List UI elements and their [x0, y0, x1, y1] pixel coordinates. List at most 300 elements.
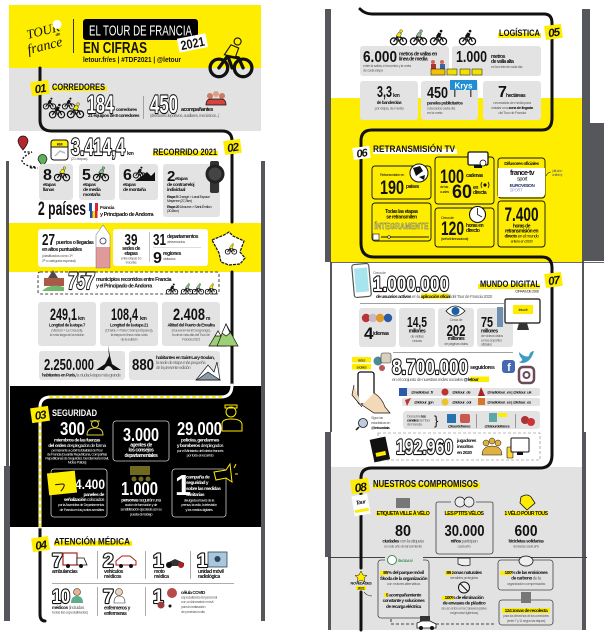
card: sedes, departamentos y regiones: sedes de [122, 246, 141, 252]
item: célula COVID [153, 587, 218, 614]
card: 6 etapas de montaña: etapas [123, 182, 136, 188]
card: 2.250.000 París [39, 351, 125, 380]
box: 7.400 horas: directo en el mundo [504, 234, 539, 238]
item: célula COVID: para la realización [181, 605, 206, 609]
box: 757 municipios [38, 268, 219, 295]
stat: 1.000 personas [121, 466, 162, 516]
section 06 tag: 06 [356, 147, 369, 161]
card: 14,5 millones visitas [399, 308, 435, 347]
card: 75 millones vídeos: en los soportes [481, 338, 502, 342]
commitment: ville à vélo [376, 498, 430, 548]
stat: 29.000: por el Ministerio del Interior francés [177, 449, 224, 453]
box: 120 horas en directo: directo [466, 228, 480, 234]
section 05 tag: 05 [548, 27, 561, 40]
card: etapa 21: (Chatou > París Champs-Élysées), [105, 328, 153, 332]
item: ambulancias: 7 [52, 551, 62, 572]
card: 75 millones vídeos: 75 [481, 314, 493, 331]
card: 27 puertos: 2ª o categoría especial) [42, 258, 76, 263]
icon: riders group [43, 98, 84, 118]
box: 7.400 horas: 7.400 [504, 205, 538, 226]
box: difusores oficiales: EUROVISION [510, 183, 535, 188]
card: 1.000 metros de valla alta: de valla alta [491, 59, 514, 65]
card: 27 puertos [38, 229, 108, 267]
note: difusión anfitrión: anfitrión) [552, 173, 562, 177]
card: etapa 21: Longitud de la etapa 21 [110, 322, 149, 328]
icon: smartphone [352, 263, 371, 298]
icon: hand holding phone [352, 372, 390, 413]
card: 27 puertos: 27 [42, 232, 55, 249]
card: sedes, departamentos y regiones: 31 [153, 232, 166, 249]
stat: 300 miembros: permanente a cubrir la totalidad del Tour [52, 448, 104, 452]
card: 6 etapas de montaña: 6 [123, 167, 132, 184]
note: estadísticas letourdata [356, 416, 391, 430]
note: difusión anfitrión: (difusión [552, 169, 562, 173]
item: 10 médicos [52, 587, 89, 614]
item: moto médica: médica [154, 574, 169, 580]
stat: 29.000: 29.000 [177, 419, 222, 439]
icon: police officer [87, 420, 103, 435]
icon: yellow road sign [47, 471, 77, 495]
card: 8 etapas llanas: llanas [43, 187, 55, 193]
card: Envalira: la cima más alta del Tour de [172, 333, 210, 337]
card: 880 Saint-Lary-Soulan [129, 351, 220, 380]
box: 120 horas en directo: (señal internacional) [441, 237, 469, 241]
card: 6.000 metros de vallas: metros de vallas en [399, 52, 437, 58]
digital dividers [360, 303, 513, 353]
item: célula COVID: especializada del personal [181, 596, 218, 600]
icon: spectators and barriers [431, 60, 482, 75]
box: todas las etapas íntegramente: Todas las etapas [385, 209, 419, 215]
stat: 300 miembros: miembros de las fuerzas [54, 438, 101, 444]
section 07 tag: 07 [548, 275, 561, 288]
icon: megaphone [214, 464, 238, 482]
card: etapa 7: km [78, 316, 85, 322]
item: moto médica: 1 [153, 551, 164, 572]
card: 4 idiomas: 4 [364, 324, 374, 343]
box: 120 horas en directo: Cerca de [441, 216, 454, 220]
card: 3,3 km banderolas: por etapa, de media [375, 106, 405, 110]
box: 190 países [372, 166, 431, 199]
stat: 29.000 [177, 419, 224, 458]
header: Tour de France logo [22, 18, 68, 58]
box: 192.960 jugadores: 192.960 [396, 436, 453, 459]
card: etapa 7 [38, 302, 96, 346]
card: Envalira: m [206, 316, 211, 322]
box: 3.000 agentes: los consejos [129, 448, 154, 454]
stat: 1.000 personas: puesta de trabajo [130, 512, 152, 516]
card: 2 etapas contrarreloj: individual [167, 187, 185, 193]
card: 7 hectáreas: 7 [498, 84, 507, 101]
stat: 1.000.000 usuarios: 1.000.000 [373, 273, 449, 296]
stat: 1.000 personas: personas seguirán una [121, 498, 162, 502]
card: 880 Saint-Lary-Soulan: la sede de etapa más pequeña [156, 360, 206, 365]
item: ambulancias: ambulancias [52, 569, 78, 575]
card: 2 etapas contrarreloj: Etapa 5 Changé > Laval Espace [167, 195, 210, 199]
section 08 tag: 08 [354, 480, 368, 495]
stat: 29.000: por todo el recorrido [187, 454, 214, 458]
box: 192.960 jugadores: en 2020 [457, 450, 472, 456]
box: 100 cadenas y 60 en directo: cuales [440, 190, 449, 194]
item: vehículos médicos [103, 551, 136, 580]
card: sedes, departamentos y regiones: etapas [124, 251, 138, 257]
card: 5 etapas media montaña [79, 164, 115, 200]
heading: seguridad: SEGURIDAD [52, 408, 97, 419]
item: 7 enfermeros [103, 587, 131, 617]
card: Envalira: (Souvenir Henri Desgrange), [171, 328, 211, 332]
box: 120 horas en directo [435, 208, 494, 247]
panel: right page backgrounds [328, 98, 604, 630]
card: 5 etapas media montaña: 5 [82, 167, 91, 184]
note: estadísticas letourdata: Sigue las [371, 416, 383, 420]
card: 450 paneles: 450 [427, 85, 448, 102]
card: Envalira: 2.408 [173, 305, 205, 324]
card: sedes, departamentos y regiones: entre etapas 10 [121, 256, 141, 260]
icon: cyclist [210, 38, 252, 77]
section 03 tag: 03 [34, 409, 48, 423]
commitment: ville à vélo: en este año de lanzamiento [384, 544, 422, 548]
title: El Tour de Francia en cifras [83, 19, 198, 64]
commitment: ville à vélo: ciudades con la etiqueta [382, 538, 424, 544]
card: etapa 21: la etapa en línea más corta [111, 333, 149, 337]
card: 6 etapas de montaña [119, 164, 158, 200]
commitment: 1 vélo pour tous: 600 [514, 523, 538, 540]
commitment: zonas naturales y plástico: 89 zonas naturales [446, 570, 482, 576]
box: Škoda movilidad: constante y soluciones [383, 598, 425, 603]
stat: 1.000.000 usuarios [373, 271, 493, 299]
box: emisiones de carbono: de carbono de la [511, 576, 542, 580]
heading: mundo digital: MUNDO DIGITAL [480, 279, 540, 290]
card: canales del Tour [403, 411, 540, 429]
box: difusores oficiales [498, 158, 545, 198]
section 06 tag [352, 146, 371, 161]
commitment: zonas naturales y plástico: de uso único en la Caravana (salvo [441, 606, 487, 610]
box: zonas de recolecta: para los desechos de los corredores [503, 614, 549, 618]
box: emisiones de carbono [498, 556, 553, 590]
icon: globe [410, 164, 428, 182]
box: difusores oficiales: france·tv [510, 170, 535, 177]
icon: snowy mountains [196, 362, 220, 380]
box: 100 cadenas y 60 en directo [435, 157, 494, 204]
item: vehículos médicos: vehículos [104, 569, 124, 575]
stat: 2 países [38, 199, 155, 220]
item: vehículos médicos: 2 [103, 551, 113, 572]
card: 6.000 metros de vallas: entre la salida, el recorrido y la meta [363, 64, 412, 68]
box: Škoda movilidad: 5 acompañamiento [386, 592, 422, 598]
social handles: @letour_jpn [414, 400, 434, 404]
icon: France map [212, 232, 245, 265]
icon: desktop screen: letour.fr [519, 308, 529, 312]
card: 14,5 millones visitas: de visitas [410, 334, 424, 338]
stat divider [142, 96, 145, 119]
card: 7 hectáreas [483, 81, 541, 120]
box: 4.400 paneles: señalización colocados [64, 497, 105, 502]
card: sedes, departamentos y regiones: inocetas [126, 260, 137, 264]
icons: twitter, facebook, instagram [502, 351, 534, 383]
heading: nuestros compromisos: NUESTROS COMPROMISOS [373, 479, 478, 490]
box: 4.400 paneles [51, 469, 107, 517]
card: 202 millones páginas: millones [448, 336, 465, 342]
note: redes sociales [352, 357, 371, 370]
note: redes sociales: sociales [356, 366, 367, 370]
card: 75 millones vídeos [477, 307, 513, 347]
card: 5 etapas media montaña: etapas [83, 182, 96, 188]
box: 7.400 horas: horas de [513, 224, 531, 230]
icon: flag hearts [89, 203, 98, 218]
stat: 450 acompañantes: (directores deportivos, auxiliares, mecánicos...) [150, 113, 220, 118]
card: 75 millones vídeos: oficiales [481, 342, 492, 346]
stat: 184 corredores: 184 [87, 91, 114, 119]
stat: 29.000: policías, gendarmes [181, 438, 220, 444]
card: sedes, departamentos y regiones: 9 [153, 250, 162, 267]
box: 757 municipios: municipios recorridos entre Francia [96, 277, 172, 283]
box: 757 municipios: 757 [68, 268, 95, 295]
card: 202 millones páginas: Cerca de [450, 318, 463, 322]
card: 450 paneles: en la meta [427, 110, 443, 115]
stat: 1.000.000 usuarios: Cerca de [373, 271, 386, 275]
icon: mountains [209, 324, 238, 346]
box: 4.400 paneles: 4.400 [75, 476, 105, 492]
card: etapa 7: 249,1 [50, 305, 77, 324]
social handles: @radiotour_en | @letour_uk [487, 390, 532, 394]
stat: 1.000 personas: sensibilización ejecutada con su [121, 508, 162, 512]
badge: novedades 2021: NOVEDADES [351, 582, 372, 586]
box: todas las etapas íntegramente [372, 203, 431, 241]
stat: 8.700.000 seguidores: seguidores [470, 365, 495, 371]
icon: staff group [206, 91, 226, 105]
card: 14,5 millones visitas: 14,5 [407, 314, 427, 331]
card: 1.000 metros de valla alta [452, 46, 541, 76]
stat: 300 miembros [45, 419, 109, 464]
section 02 tag: 02 [227, 142, 240, 155]
box: Škoda movilidad: Škoda de la organización [380, 574, 428, 582]
box: 192.960 jugadores: jugadores [456, 438, 477, 444]
card: 2 etapas contrarreloj: etapas [175, 176, 188, 182]
box: 100 cadenas y 60 en directo: directa [473, 190, 487, 196]
title: El Tour de Francia en cifras: letour.fr/es | #TDF2021 | @letour [83, 55, 181, 64]
card: 2 etapas contrarreloj: (30,8km) [167, 209, 179, 213]
section 01 tag [30, 80, 50, 97]
card: etapa 21: de la edición [121, 338, 138, 342]
section 04 tag [31, 536, 50, 553]
card: 27 puertos: en altos puntuables [42, 247, 82, 253]
commitment: ville à vélo: 80 [395, 523, 411, 540]
commitment: 1 vélo pour tous [504, 495, 549, 548]
card: 75 millones vídeos: de vídeos vistos [481, 334, 503, 338]
box: difusores oficiales: sport [517, 176, 528, 182]
item: 10 médicos: médicos (incluidas [52, 605, 85, 610]
card: sedes, departamentos y regiones: departamentos [167, 234, 199, 240]
card: 202 millones páginas [438, 308, 474, 347]
card: 1.000 metros de valla alta: metros [491, 54, 506, 60]
box: zonas de recolecta: (entre 7 y 11 según las etapas) [507, 619, 545, 623]
note: estadísticas letourdata: @letourdata [371, 426, 391, 430]
card: 2 etapas contrarreloj: 2 [167, 168, 175, 185]
stat: 3.414,4 km: 3.414,4 [71, 134, 125, 161]
stat: 29.000: y bomberos desplegados [177, 443, 224, 449]
item: 7 enfermeros: enfermeras [104, 611, 127, 617]
section 07 tag [544, 272, 563, 289]
item: 7 enfermeros: enfermeros y [104, 606, 131, 612]
item: 10 médicos: 10 [52, 587, 70, 608]
heading: logística: LOGÍSTICA [499, 28, 540, 39]
card: 6.000 metros de vallas: 6.000 [363, 49, 397, 66]
route line left page [40, 68, 232, 621]
box: todas las etapas íntegramente: ÍNTEGRAMENTE [374, 222, 429, 231]
box: 190 países: 190 [380, 178, 404, 199]
stat: 2 países: 2 países [38, 199, 86, 220]
heading: mundo digital: CIFRAS DE 2020 [515, 290, 539, 294]
icon: Krys sign [450, 80, 477, 97]
box: difusores oficiales: Difusores oficiales [504, 161, 539, 167]
card: 2.250.000 París: habitantes en París, la ciudad-etapa más grande [42, 372, 121, 378]
box: 1 campaña de seguridad: campaña de [186, 474, 210, 480]
card: 4 idiomas: idiomas [373, 331, 389, 337]
stat: 8.700.000 seguidores: en el conjunto de nuestras redes sociales @letour [392, 377, 479, 383]
heading: atención médica: ATENCIÓN MÉDICA [54, 536, 130, 548]
badge: novedades 2021 [351, 571, 372, 596]
commitment: zonas naturales y plástico: sensibles protegidas [450, 576, 478, 580]
box: Škoda movilidad: 85% del parque móvil [383, 570, 424, 576]
commitment: zonas naturales y plástico: de envases de plástico [443, 600, 486, 606]
box: 192.960 jugadores: inscritos [457, 444, 474, 450]
heading: recorrido 2021: RECORRIDO 2021 [153, 147, 218, 158]
route line right page [360, 9, 552, 630]
card: 8 etapas llanas [39, 164, 73, 200]
card: 450 paneles [421, 81, 478, 120]
box: 757 municipios: y el Principado de Andorra [96, 284, 153, 290]
card: 27 puertos: (clasificados como 1ª, [42, 253, 73, 258]
box: 100 cadenas y 60 en directo: en [473, 185, 478, 191]
card: canales del Tour: @tourdefrance [448, 424, 470, 428]
card: 2.250.000 París: 2.250.000 [44, 357, 94, 374]
header divider [73, 19, 74, 53]
card: etapa 7: la más larga de la edición [50, 333, 84, 337]
section 02 tag [223, 139, 242, 156]
icon: clock [470, 206, 486, 222]
box: 1 campaña de seguridad: 1 [175, 470, 191, 502]
item: unidad móvil radiológica: 1 [197, 551, 208, 572]
card: sedes, departamentos y regiones: atravesados [167, 239, 185, 244]
card: 2 etapas contrarreloj: Mayenne (27,2km) [167, 199, 192, 203]
box: 4.400 paneles: por la Asamblea de Departamentos [58, 503, 105, 507]
card: 5 etapas media montaña: de media [83, 187, 101, 193]
icon: desktop screen [505, 299, 540, 330]
item: unidad móvil radiológica: radiológica [198, 574, 220, 580]
item: vehículos médicos: médicos [104, 574, 122, 580]
card: 14,5 millones visitas: millones [409, 328, 426, 334]
card: 2 etapas contrarreloj [163, 164, 220, 217]
card: 3,3 km banderolas: km [393, 93, 400, 99]
box: Škoda movilidad: con motores alternativos [387, 582, 421, 586]
icon: game logo card [370, 437, 390, 462]
card: Envalira: Francia 2021 [182, 338, 200, 342]
icon: tower [96, 225, 110, 268]
section 04 tag: 04 [35, 539, 49, 553]
card: 2 etapas contrarreloj: de contrarreloj [167, 182, 194, 188]
icon: km calendar: KM [57, 142, 63, 146]
stat: 3.414,4 km: km [127, 151, 134, 157]
commitment: ville à vélo: ETIQUETA VILLE À VÉLO [377, 509, 430, 517]
card: 880 Saint-Lary-Soulan: de la presente edición [156, 365, 191, 370]
card: sedes, departamentos y regiones: regiones [163, 251, 181, 257]
title: El Tour de Francia en cifras: EN CIFRAS [83, 40, 147, 57]
social handles: @letour_col [452, 400, 471, 404]
item: célula COVID: con un laboratorio móvil [181, 600, 214, 604]
box: 7.400 horas: retransmisión en [505, 228, 538, 234]
card: Envalira: Altitud del Puerto de Envalira [167, 322, 216, 328]
box: zonas de recolecta [499, 592, 553, 625]
icon: watch [206, 161, 224, 193]
stat: 300 miembros: Motos Policía) [68, 460, 86, 464]
card: 75 millones vídeos: millones [481, 328, 498, 334]
box: 1 campaña de seguridad [172, 469, 226, 517]
stat: 184 corredores: corredores [116, 107, 138, 113]
box: 3.000 agentes [113, 421, 169, 461]
social handles: @letour_de [452, 390, 471, 394]
icon: caravan car with dashed route [391, 616, 494, 630]
box: 1 campaña de seguridad: sanitarias [186, 492, 205, 498]
card: 1.000 metros de valla alta: 1.000 [456, 49, 487, 66]
card: 880 Saint-Lary-Soulan: 880 [132, 357, 154, 374]
icon: gendarme [222, 405, 242, 431]
box: zonas de recolecta: 124 zonas de recolecta [505, 608, 548, 614]
section 01 tag: 01 [34, 83, 47, 96]
header: Tour de France logo: de [55, 31, 61, 37]
commitment: 1 vélo pour tous: bicicletas solidarias [509, 538, 544, 544]
year tag 2021: 2021 [179, 34, 206, 53]
stat: 450 acompañantes: 450 [150, 91, 178, 119]
icon: social bubbles [374, 353, 391, 371]
stat: 300 miembros: 300 [60, 419, 85, 439]
card: 202 millones páginas: 202 [446, 323, 466, 340]
header: Tour de France logo: TOUR [25, 19, 61, 42]
item: moto médica [153, 551, 184, 580]
badge: Tour logo [351, 494, 371, 516]
card: etapa 7: (Vierzon > Le Creusot), [51, 328, 83, 332]
card: canales del Tour: canales del Tour [407, 418, 431, 422]
title: El Tour de Francia en cifras: EL TOUR DE FRANCIA [89, 22, 192, 40]
stat: 1.000 personas: acción de formación y de [125, 503, 157, 507]
box: 1 campaña de seguridad: seguridad y [186, 480, 209, 486]
card: 6.000 metros de vallas: línea de media [399, 56, 428, 62]
stat: 300 miembros: del orden desplegados de forma [48, 443, 106, 449]
section 08 tag [350, 478, 370, 496]
card: 450 paneles: paneles publicitarios [427, 100, 463, 106]
card: etapa 7: Longitud de la etapa 7 [49, 322, 86, 328]
card: canales del Tour: @letourdefrance [485, 424, 510, 428]
heading: retransmisión TV: RETRANSMISIÓN TV [373, 143, 455, 154]
card: 880 Saint-Lary-Soulan: habitantes en Saint-Lary-Soulan, [156, 355, 214, 360]
item: 10 médicos: todas las especialidades) [52, 610, 89, 614]
card: 7 hectáreas: del Tour de Francia [498, 110, 527, 115]
box: emisiones de carbono: 100% de las emisiones [505, 570, 548, 576]
box: Škoda movilidad [378, 556, 429, 618]
icons: logistics riders [390, 30, 476, 45]
stat: 2 países: y Principado de Andorra [100, 212, 155, 218]
card: 14,5 millones visitas: únicas [412, 338, 422, 343]
card: Envalira [162, 302, 220, 346]
commitment: les p'tits vélos: LES P'TITS VÉLOS [444, 509, 485, 517]
card: etapa 21: 108,4 [111, 305, 138, 324]
card: 7 hectáreas: hectáreas [506, 93, 526, 99]
box: 1 campaña de seguridad: divulgada a través de la [184, 498, 214, 502]
box: 192.960 jugadores [378, 433, 540, 460]
commitment: zonas naturales y plástico: 100% de eliminación [445, 595, 484, 601]
icon: players and devices [482, 438, 529, 458]
box: 3.000 agentes: agentes de [130, 442, 152, 448]
card: sedes, departamentos y regiones: 39 [124, 232, 138, 249]
icon: eye [446, 306, 465, 316]
